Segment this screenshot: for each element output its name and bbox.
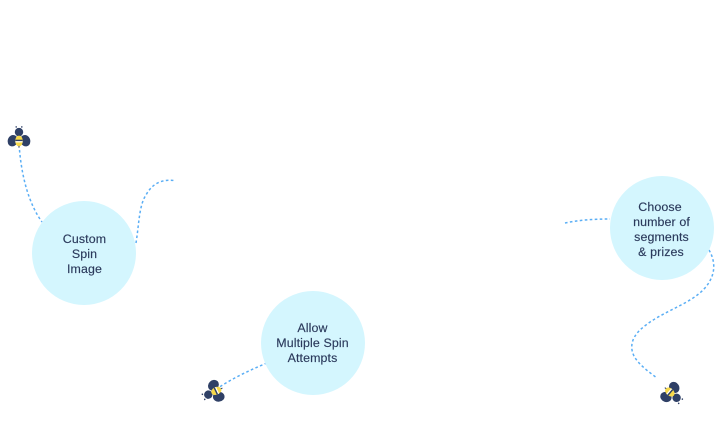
path: Custom Spin Image to centre: [136, 180, 174, 243]
icon: bee top left: [6, 126, 32, 148]
circle: Custom Spin Image: Image: [67, 262, 102, 276]
circle: Choose number of segments & prizes: number of: [633, 215, 690, 229]
circle: Allow Multiple Spin Attempts: Allow: [297, 321, 328, 335]
circle: Custom Spin Image: Custom: [63, 232, 106, 246]
circle: Custom Spin Image: Spin: [72, 247, 97, 261]
circle: Allow Multiple Spin Attempts: Attempts: [288, 351, 337, 365]
path: Choose number of segments to bee: [632, 250, 714, 378]
path: bee to Custom Spin Image: [20, 150, 42, 222]
path: centre to Choose number of segments: [565, 219, 610, 223]
circle: Allow Multiple Spin Attempts: Multiple Spin: [276, 336, 349, 350]
circle: Custom Spin Image: [32, 201, 136, 305]
circle: Allow Multiple Spin Attempts: [261, 291, 365, 395]
icon: bee bottom right: [656, 378, 690, 412]
circle: Choose number of segments & prizes: & prizes: [638, 245, 684, 259]
circle: Choose number of segments & prizes: Choose: [638, 200, 682, 214]
icon: bee bottom centre: [197, 376, 228, 409]
circle: Choose number of segments & prizes: segments: [634, 230, 689, 244]
circle: Choose number of segments & prizes: [610, 176, 714, 280]
path: bee to Allow Multiple Spin Attempts: [218, 363, 267, 388]
